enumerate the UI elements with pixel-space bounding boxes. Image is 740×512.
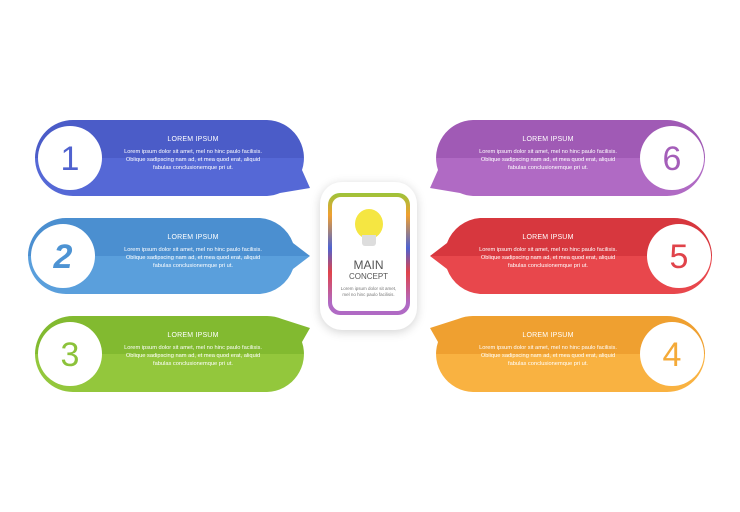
text 3 xyxy=(124,332,262,367)
text 6: Lorem ipsum dolor sit amet, mel no hinc paulo facilisis. xyxy=(479,149,617,155)
text: concept: Lorem ipsum dolor sit amet, mel no hinc paulo facilisis. xyxy=(341,286,396,297)
item 1: 1 xyxy=(61,140,79,178)
text 4 xyxy=(479,332,617,367)
text 4: LOREM IPSUM xyxy=(522,332,574,339)
heading: main concept: CONCEPT xyxy=(349,272,388,281)
item 5 xyxy=(430,218,712,294)
item 4 xyxy=(430,316,705,392)
item 6: 6 xyxy=(663,140,681,178)
item 5: 5 xyxy=(670,238,688,276)
text 5: LOREM IPSUM xyxy=(522,234,574,241)
item 4: 4 xyxy=(663,336,681,374)
gradient frame xyxy=(328,193,410,315)
text 1: fabulas conclusionemque pri ut. xyxy=(153,165,233,171)
text 5: fabulas conclusionemque pri ut. xyxy=(508,263,588,269)
item 2 xyxy=(28,218,310,294)
text 1 xyxy=(124,136,262,171)
item 3 xyxy=(35,316,310,392)
text 3: fabulas conclusionemque pri ut. xyxy=(153,361,233,367)
text 2 xyxy=(124,234,262,269)
text 2: fabulas conclusionemque pri ut. xyxy=(153,263,233,269)
heading: main concept: MAIN xyxy=(354,258,384,272)
item 2: 2 xyxy=(53,238,73,276)
text 2: LOREM IPSUM xyxy=(167,234,219,241)
text 3: Lorem ipsum dolor sit amet, mel no hinc paulo facilisis. xyxy=(124,345,262,351)
item 3: 3 xyxy=(61,336,79,374)
main concept card xyxy=(320,182,417,330)
text 5 xyxy=(479,234,617,269)
text 6 xyxy=(479,136,617,171)
item 1 xyxy=(35,120,310,196)
text 3: LOREM IPSUM xyxy=(167,332,219,339)
text 3: Oblique sadipscing nam ad, et mea quod erat, aliquid xyxy=(126,353,260,359)
text 1: LOREM IPSUM xyxy=(167,136,219,143)
text 5: Oblique sadipscing nam ad, et mea quod erat, aliquid xyxy=(481,255,615,261)
icon: light bulb xyxy=(355,209,383,246)
item 6 xyxy=(430,120,705,196)
text 4: fabulas conclusionemque pri ut. xyxy=(508,361,588,367)
text 4: Lorem ipsum dolor sit amet, mel no hinc paulo facilisis. xyxy=(479,345,617,351)
text 2: Lorem ipsum dolor sit amet, mel no hinc paulo facilisis. xyxy=(124,247,262,253)
text 2: Oblique sadipscing nam ad, et mea quod erat, aliquid xyxy=(126,255,260,261)
text 4: Oblique sadipscing nam ad, et mea quod erat, aliquid xyxy=(481,353,615,359)
text 5: Lorem ipsum dolor sit amet, mel no hinc paulo facilisis. xyxy=(479,247,617,253)
text 1: Lorem ipsum dolor sit amet, mel no hinc paulo facilisis. xyxy=(124,149,262,155)
text 6: Oblique sadipscing nam ad, et mea quod erat, aliquid xyxy=(481,157,615,163)
text 6: LOREM IPSUM xyxy=(522,136,574,143)
text 1: Oblique sadipscing nam ad, et mea quod erat, aliquid xyxy=(126,157,260,163)
heading: main concept xyxy=(349,258,388,281)
text 6: fabulas conclusionemque pri ut. xyxy=(508,165,588,171)
